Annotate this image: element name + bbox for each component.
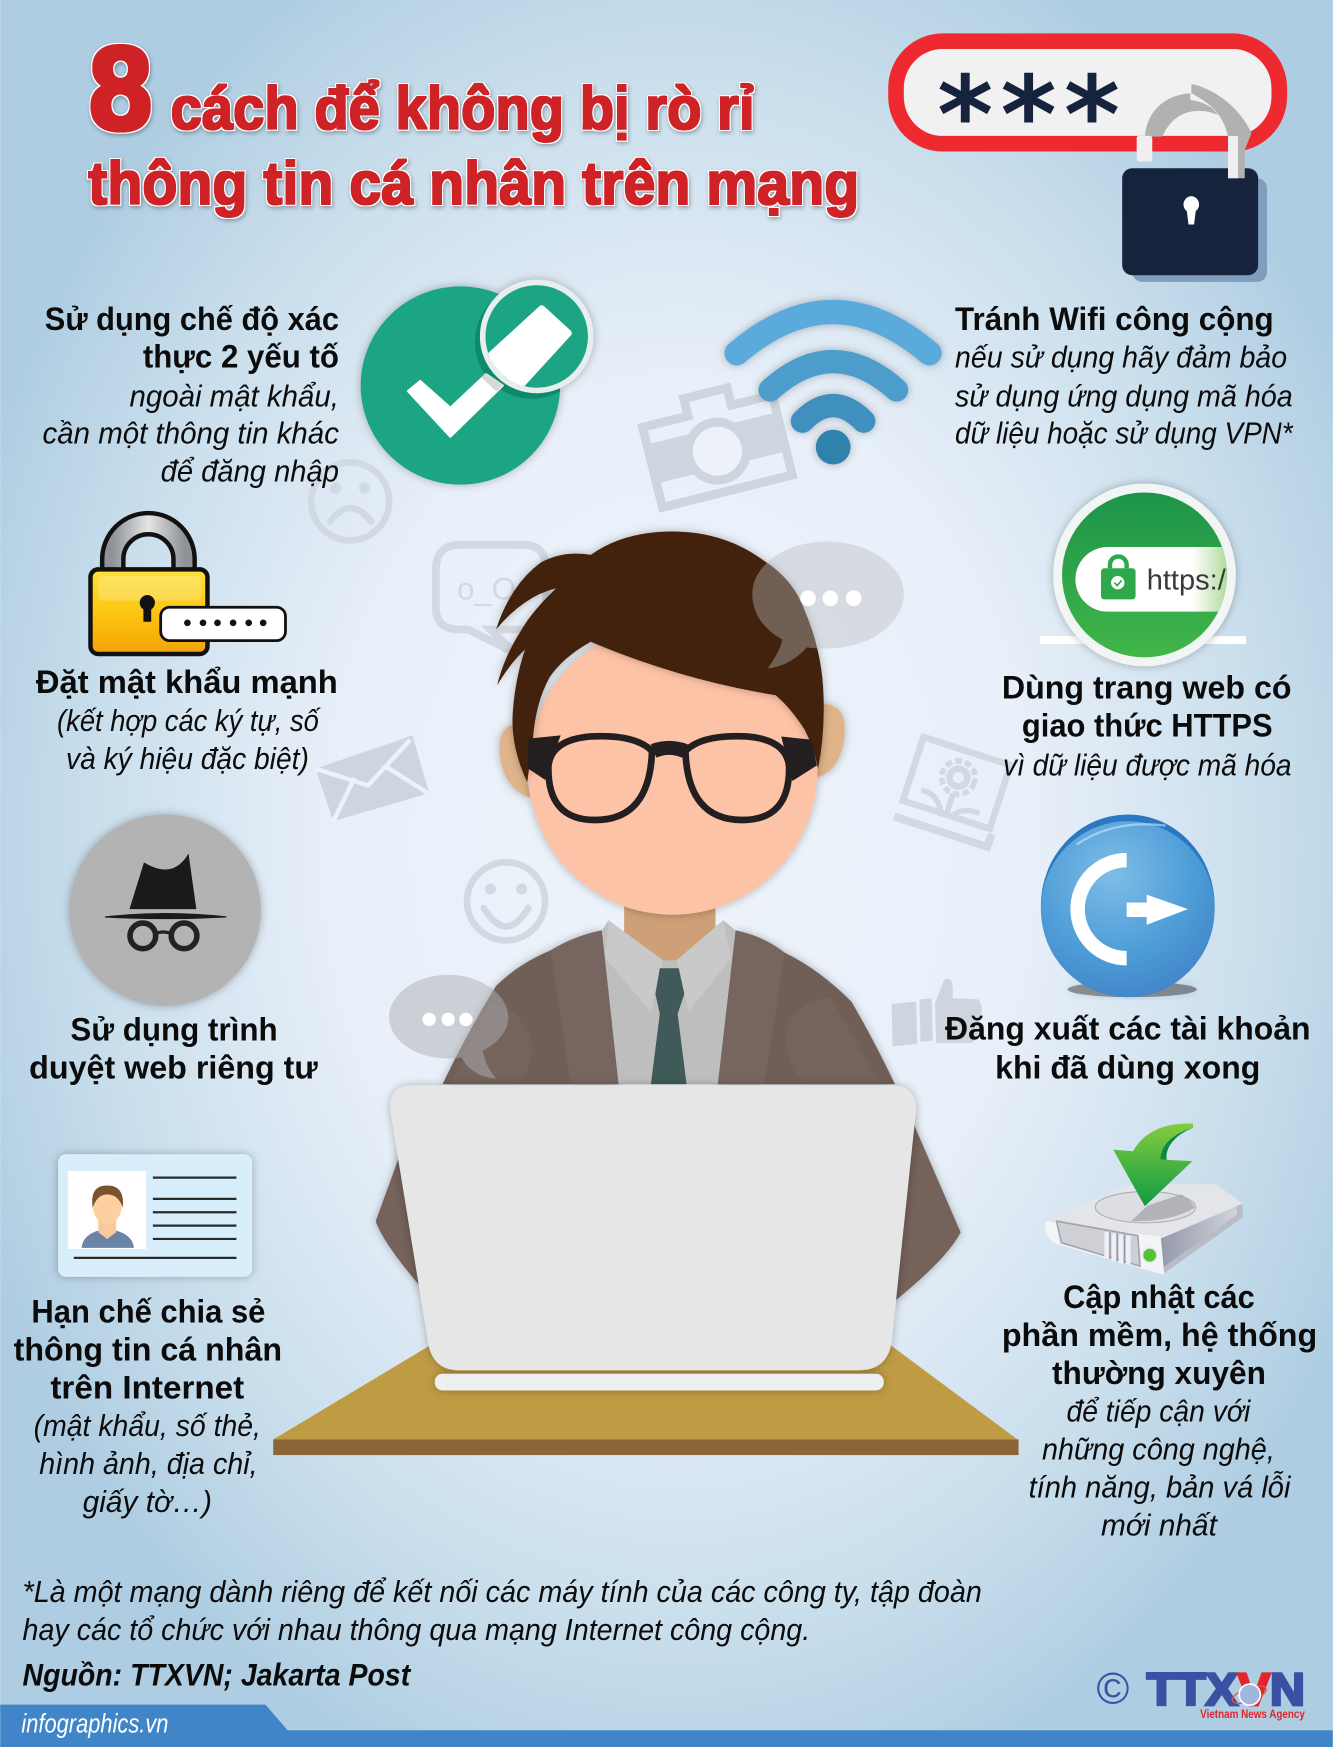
text block: sử dụng ứng dụng mã hóa (955, 381, 1293, 414)
panel: strong password (36, 524, 338, 776)
icon: id card (58, 1154, 252, 1277)
laptop (390, 1085, 916, 1390)
logo: TTXVN (1097, 1664, 1305, 1721)
text block: (kết hợp các ký tự, số (57, 705, 321, 738)
tie (651, 968, 687, 1084)
face (528, 623, 817, 915)
desk (273, 1346, 1019, 1455)
footnote (23, 1576, 982, 1647)
icon: camera (638, 378, 792, 507)
agency wordmark: TTXVN (1147, 1664, 1305, 1715)
text block (14, 1294, 282, 1519)
text block: trên Internet (50, 1369, 244, 1405)
bubble: upper right (752, 541, 904, 668)
icon: chat outline (436, 545, 546, 653)
panel: https (1002, 484, 1292, 782)
padlock shadow (1132, 178, 1267, 282)
text block: nếu sử dụng hãy đảm bảo (955, 342, 1287, 375)
icon: smile (467, 862, 545, 940)
text block (955, 301, 1294, 450)
icon: thumbs up (892, 979, 982, 1046)
text block: thực 2 yếu tố (143, 339, 339, 375)
text block: giấy tờ…) (83, 1486, 212, 1519)
icon: chat outline: o_O (457, 571, 516, 606)
text block: ngoài mật khẩu, (129, 381, 339, 414)
text block: (mật khẩu, số thẻ, (34, 1410, 261, 1443)
text block: Dùng trang web có (1002, 670, 1292, 706)
footer bar: infographics.vn (21, 1709, 168, 1739)
text block: Đăng xuất các tài khoản (945, 1011, 1310, 1047)
icon: incognito (69, 814, 261, 1006)
footnote: *Là một mạng dành riêng để kết nối các máy tính của các công ty, tập đoàn (23, 1576, 982, 1609)
text block: thường xuyên (1052, 1355, 1266, 1391)
text block: để đăng nhập (161, 455, 339, 488)
shirt and collar (602, 920, 736, 1084)
title: 8 (89, 23, 152, 155)
text block: Sử dụng trình (70, 1012, 278, 1048)
text block: tính năng, bản vá lỗi (1029, 1471, 1292, 1504)
text block (1002, 670, 1292, 782)
text block: Đặt mật khẩu mạnh (36, 664, 338, 700)
title (88, 23, 859, 217)
copyright mark: © (1097, 1665, 1130, 1714)
panel: update software (1002, 1124, 1317, 1542)
text block: Cập nhật các (1063, 1279, 1255, 1315)
text block: khi đã dùng xong (995, 1050, 1260, 1086)
masked password: *** (937, 55, 1120, 179)
password field (896, 41, 1279, 144)
open shackle (1137, 84, 1251, 178)
speech bubbles overlapping the man (389, 541, 904, 1079)
text block: mới nhất (1101, 1509, 1219, 1542)
keyhole (1183, 196, 1199, 225)
text block: Sử dụng chế độ xác (45, 301, 339, 337)
text block: thông tin cá nhân (14, 1331, 282, 1367)
globe (1230, 1682, 1268, 1707)
text block: duyệt web riêng tư (29, 1050, 318, 1086)
panel: private browsing (29, 814, 318, 1086)
text block: vì dữ liệu được mã hóa (1003, 749, 1292, 782)
text block: và ký hiệu đặc biệt) (66, 743, 309, 776)
text block (43, 301, 339, 488)
icon: https badge: https:/ (1147, 564, 1227, 596)
text block: Tránh Wifi công cộng (955, 301, 1274, 337)
footnote: hay các tổ chức với nhau thông qua mạng Internet công cộng. (23, 1614, 810, 1647)
text block: dữ liệu hoặc sử dụng VPN* (955, 417, 1294, 450)
icon: password box and padlock (896, 41, 1279, 282)
icon: logout button (1041, 814, 1215, 997)
agency tagline: Vietnam News Agency (1200, 1708, 1305, 1721)
hair (496, 531, 824, 782)
source: Nguồn: TTXVN; Jakarta Post (23, 1658, 412, 1693)
icon: yellow padlock (90, 524, 285, 654)
padlock body (1122, 168, 1258, 275)
illustration: man at laptop (273, 531, 1019, 1455)
panel: log out (945, 814, 1310, 1086)
text block (29, 1012, 318, 1086)
neck (624, 891, 716, 965)
glasses (528, 735, 817, 820)
icon: https badge (1040, 484, 1246, 666)
icon: green check (361, 282, 591, 485)
panel: avoid public wifi (737, 301, 1294, 464)
icon: hard drive with arrow (1046, 1124, 1240, 1273)
title: cách để không bị rò rỉ (171, 75, 755, 142)
text block: giao thức HTTPS (1022, 707, 1273, 743)
faint background icons (311, 378, 1014, 1046)
icon: picture (894, 736, 1014, 847)
text block: để tiếp cận với (1066, 1396, 1252, 1429)
panel: two-factor authentication (43, 282, 591, 488)
panel: limit sharing personal info (14, 1154, 282, 1519)
text block: những công nghệ, (1042, 1434, 1275, 1467)
text block: hình ảnh, địa chỉ, (39, 1448, 258, 1481)
text block: cần một thông tin khác (43, 417, 339, 450)
icon: envelope (316, 735, 429, 821)
footer bar (0, 1705, 1333, 1747)
icon: wifi (737, 312, 929, 464)
text block: phần mềm, hệ thống (1002, 1317, 1317, 1353)
text block (1002, 1279, 1317, 1542)
icon: sad face (311, 462, 389, 540)
text block (36, 664, 338, 776)
title: thông tin cá nhân trên mạng (88, 150, 859, 217)
man's arms (376, 1114, 961, 1309)
text block (945, 1011, 1310, 1086)
ears (499, 704, 845, 798)
jacket (443, 930, 895, 1084)
text block: Hạn chế chia sẻ (31, 1294, 265, 1330)
bubble: lower left (389, 975, 508, 1079)
